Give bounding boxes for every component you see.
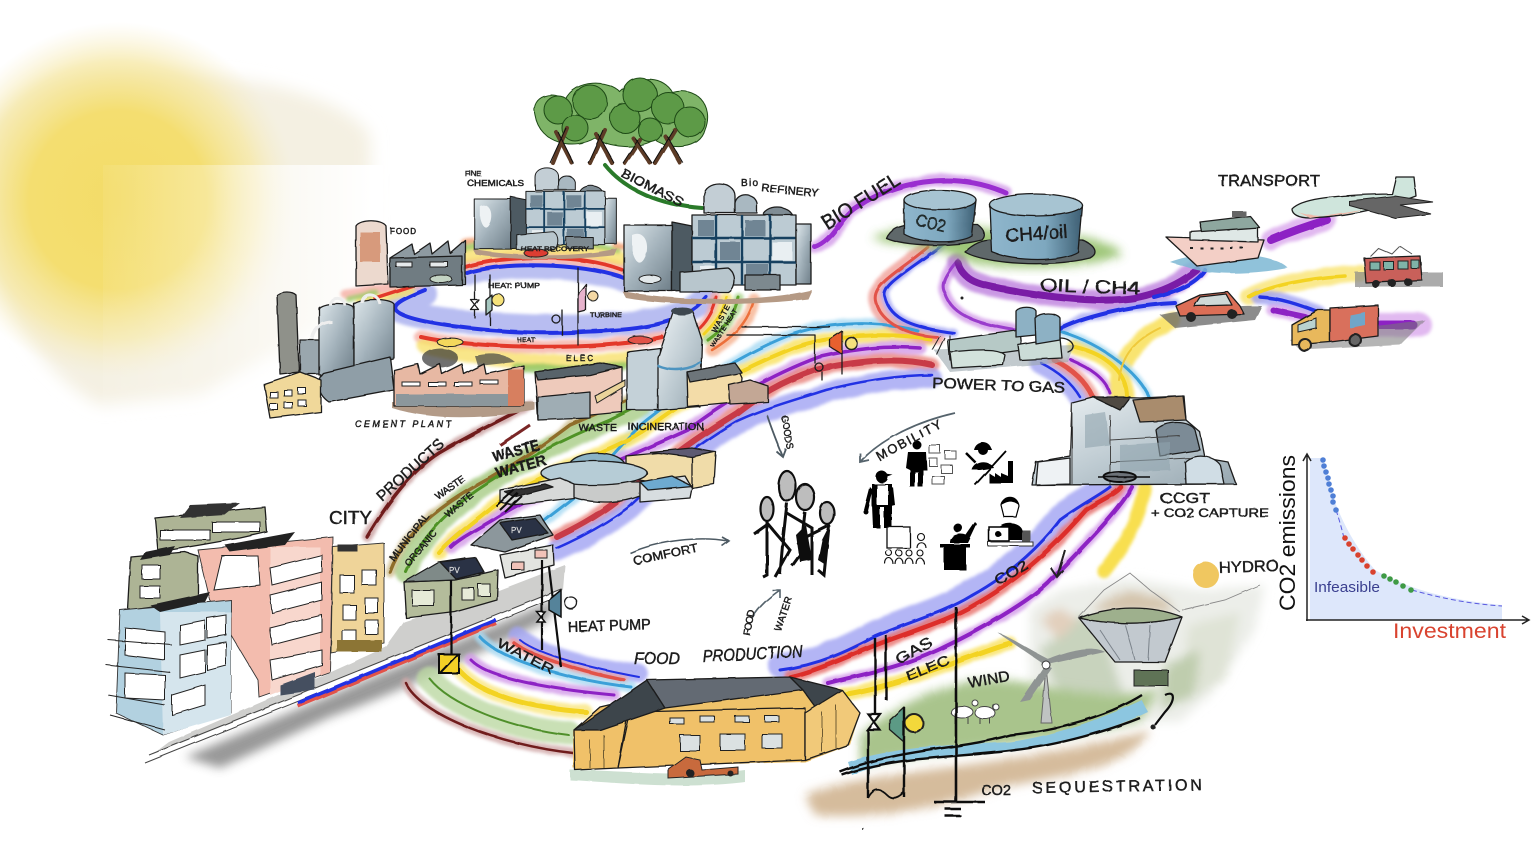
plant: power to gas [932, 307, 1075, 372]
plant: incineration tower [627, 307, 768, 410]
road shadow [185, 597, 561, 768]
label: heat pump: HEAT PUMP [568, 616, 651, 636]
halo: main arc bundle [367, 324, 932, 572]
tanks: CO2 and CH4 [872, 190, 1122, 267]
building: pink tower [198, 532, 333, 697]
label: mobility: MOBILITY [873, 416, 944, 464]
label: organic waste: WASTE [443, 490, 476, 520]
farm [570, 677, 860, 785]
heat exchanger dots [862, 296, 1156, 830]
houses with PV panels [404, 515, 554, 618]
label: products: PRODUCTS [373, 435, 448, 505]
plant: bio refinery [622, 184, 812, 304]
label: waste on ring: WASTE [710, 303, 732, 334]
label: CCGT with capture [1151, 490, 1269, 520]
heat pump and PV connection [439, 560, 577, 673]
stream core lines [367, 165, 1413, 753]
sun glow [0, 22, 383, 785]
label: water: WATER [495, 635, 557, 677]
label: heat pump in ring: HEAT: PUMP [488, 281, 540, 290]
arrow: food and water [752, 590, 780, 618]
label: waste incineration: INCINERATION [628, 422, 704, 433]
label: food production [634, 642, 804, 668]
city buildings [106, 503, 384, 735]
waste water treatment [496, 448, 716, 512]
arrow: goods [767, 415, 786, 457]
core: right arc bundle [780, 328, 1160, 695]
label: oil CH4: OIL / CH4 [1040, 275, 1140, 298]
halo: right arc bundle [780, 320, 1172, 695]
label: fine chemicals: FINE [465, 171, 481, 178]
arrow: mobility [860, 413, 955, 462]
halo: fuels and transport [815, 181, 1420, 337]
label: CO2 stream: CO2 [992, 557, 1031, 589]
building: green rear block [155, 503, 267, 552]
icon: businessman with laptop [988, 497, 1033, 546]
label: PV front: PV [449, 566, 460, 575]
icon: speaker at podium [940, 522, 977, 570]
label: CO2 tank: CO2 [914, 210, 948, 236]
axes [1303, 454, 1529, 624]
plant: incineration hall [535, 363, 625, 420]
icon: worker with cap [864, 471, 895, 528]
label: waste water: WASTE [491, 437, 541, 466]
label: waste incineration [579, 422, 704, 434]
label: wind: WIND [967, 668, 1011, 692]
label: elec in ring: ELEC [566, 354, 593, 363]
vehicle: car [1160, 292, 1262, 328]
plant: CCGT with CO2 capture [1032, 396, 1236, 485]
label: heat in ring: HEAT [517, 337, 535, 344]
mountains wash [1030, 578, 1265, 722]
drawn facilities [106, 78, 1443, 830]
valley landscape: hydro, wind, river [805, 550, 1265, 816]
brown soil wash [805, 730, 1150, 816]
core: fuels and transport [605, 165, 1413, 337]
icon: planner with charts [906, 440, 956, 487]
plant: silos and stack [264, 292, 515, 418]
watercolour halos of energy streams [346, 181, 1420, 753]
river [848, 700, 1148, 775]
people: stick figures [754, 471, 834, 577]
label: municipal waste [388, 474, 468, 564]
ground symbol: CO2 sequestration [934, 607, 985, 816]
label: food and water arrow: WATER [773, 595, 795, 633]
building: green small block [128, 546, 198, 610]
house: rear PV house [471, 515, 554, 578]
label: turbine: TURBINE [590, 312, 623, 319]
label: elec: ELEC [903, 652, 952, 684]
label: food production: FOOD [634, 649, 680, 668]
label: food and water arrow: FOOD [742, 609, 757, 637]
label: bio refinery [741, 178, 820, 200]
label: municipal waste: MUNICIPAL [388, 511, 432, 564]
farm turbine and generator [890, 707, 904, 742]
label: heat recovery: HEAT RECOVERY [521, 246, 590, 253]
label: CH4 oil tank: CH4/oil [1005, 222, 1068, 247]
hydro dam [1079, 617, 1182, 662]
vehicle: truck [1290, 305, 1425, 351]
icon: presenter and audience [885, 527, 926, 564]
arrow: comfort [630, 537, 729, 553]
feasibility region [1310, 458, 1502, 620]
label: gas: GAS [892, 634, 936, 668]
label: municipal waste: WASTE [433, 474, 468, 502]
plant: cement plant [392, 364, 535, 445]
label: bio refinery: Bio [741, 178, 758, 189]
trees: biomass [534, 78, 708, 164]
wind turbine [998, 633, 1105, 723]
y axis label: CO2 emissions [1275, 455, 1300, 611]
label: hydro: HYDRO [1219, 558, 1279, 577]
label: food and water arrow [742, 595, 795, 637]
halo: top ring [346, 241, 754, 370]
house: front PV house [404, 558, 498, 618]
core: main arc bundle [367, 324, 932, 572]
label: food production: PRODUCTION [702, 642, 804, 666]
infeasible label: Infeasible [1314, 579, 1380, 596]
top ring heat pump and turbine [430, 249, 661, 346]
label: organic waste [403, 490, 476, 569]
label: CO2 sequestration: CO2 [981, 782, 1011, 799]
road [145, 565, 565, 763]
turbine and generator on power line [727, 327, 857, 380]
label: fine chemicals: CHEMICALS [467, 179, 524, 188]
label: power to gas: POWER TO GAS [932, 375, 1065, 397]
halo: farm to heat pump bundle [406, 636, 639, 753]
green points [1381, 573, 1414, 593]
label: transport: TRANSPORT [1218, 173, 1320, 190]
plant: food factory [356, 221, 465, 287]
label: PV rear: PV [511, 526, 522, 535]
label: waste water [491, 437, 548, 482]
icon: engineer and factory slash [966, 442, 1013, 485]
label: city: CITY [329, 508, 372, 528]
blue points [1320, 457, 1339, 513]
label: goods: GOODS [778, 415, 795, 450]
plant: fine chemicals [473, 168, 617, 259]
label: bio refinery: REFINERY [761, 182, 820, 200]
vehicle: airplane [1292, 177, 1433, 218]
label: bio fuel: BIO FUEL [818, 169, 904, 234]
x axis label: Investment [1393, 620, 1506, 643]
label: CO2 sequestration: SEQUESTRATION [1032, 777, 1202, 797]
pareto curve dashed [1336, 510, 1502, 606]
sheep [951, 700, 999, 724]
label: food industry: FOOD [390, 227, 416, 236]
building: blue block [106, 592, 231, 735]
vehicle: bus [1355, 246, 1443, 288]
chart: CO2 emissions vs investment [1275, 454, 1529, 643]
core: top ring [375, 258, 754, 350]
label: biomass: BIOMASS [619, 165, 686, 210]
label: CCGT with capture: CCGT [1160, 490, 1210, 507]
vehicle: ship [1166, 211, 1288, 273]
building: yellow block [331, 543, 384, 653]
red points [1342, 535, 1376, 575]
label: waste heat: WASTE HEAT [710, 308, 739, 349]
label: organic waste: ORGANIC [403, 528, 440, 569]
meadow wash [860, 679, 1160, 765]
handwritten labels [329, 165, 1320, 799]
label: cement plant: CEMENT PLANT [355, 419, 452, 429]
label: comfort: COMFORT [632, 540, 700, 568]
label: waste incineration: WASTE [579, 422, 617, 434]
label: waste water: WATER [494, 452, 548, 482]
label: CCGT with capture: + CO2 CAPTURE [1151, 506, 1269, 520]
core: farm to heat pump bundle [406, 637, 639, 753]
label: fine chemicals [465, 171, 524, 188]
